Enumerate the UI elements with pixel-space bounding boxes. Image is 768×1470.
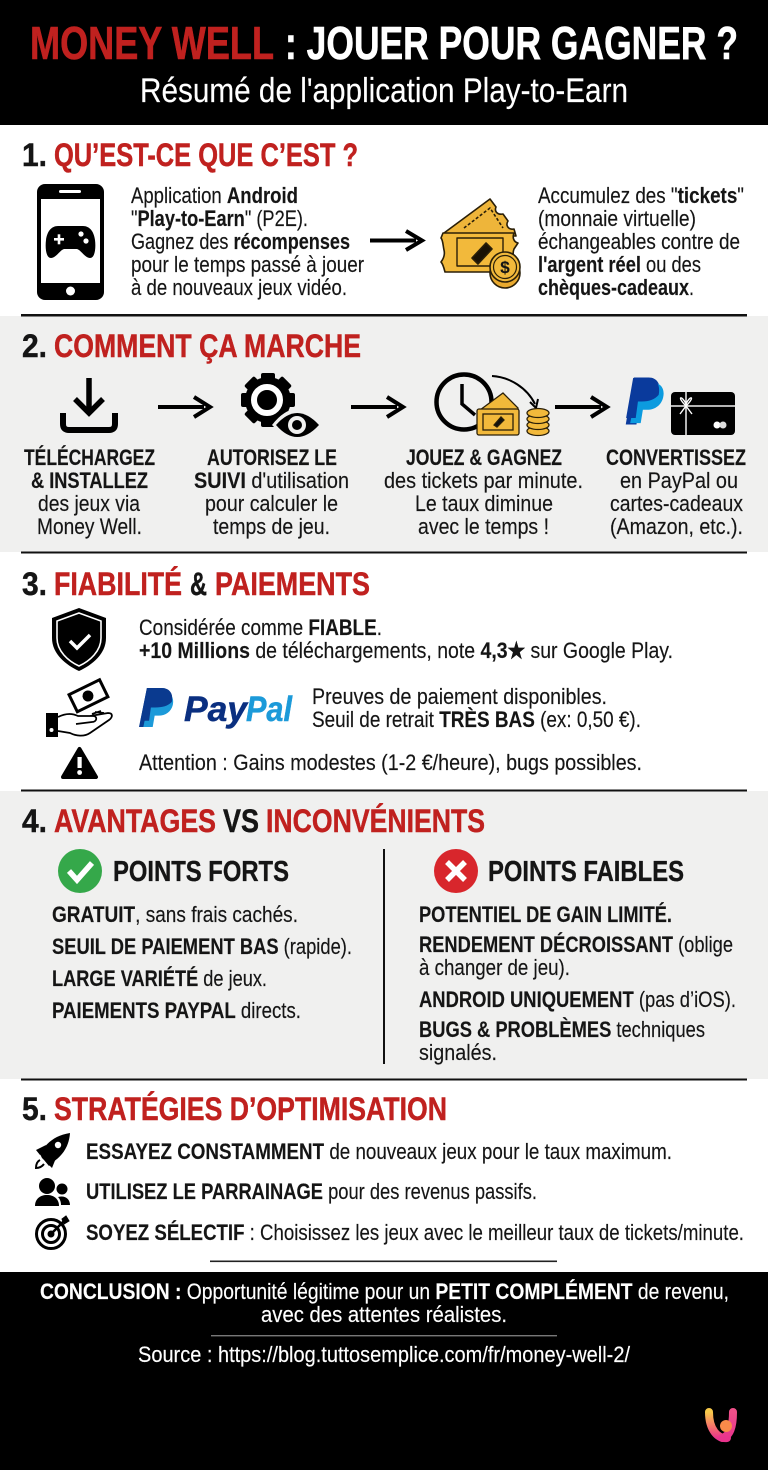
text: conclusion xyxy=(40,1279,729,1327)
text: reliable: Considérée comme FIABLE. xyxy=(139,615,382,640)
arrow xyxy=(370,231,422,250)
heading 4 xyxy=(22,803,485,839)
icon: green check xyxy=(58,849,102,893)
icon: red cross xyxy=(434,849,478,893)
arrow 1 xyxy=(158,397,210,417)
panel: section 5 optimization strategies xyxy=(22,1091,744,1262)
text: reliable: +10 Millions de téléchargements, note 4,3★ sur Google Play. xyxy=(139,638,673,663)
text: app description: Gagnez des récompenses xyxy=(131,229,350,254)
icon: warning xyxy=(63,749,96,777)
panel: section 3 reliability and payments xyxy=(22,566,673,777)
heading 3: FIABILITÉ xyxy=(54,566,182,602)
icon: brand logo xyxy=(709,1412,733,1438)
subtitle: Résumé de l'application Play-to-Earn xyxy=(140,72,628,110)
icon: gear and eye xyxy=(241,373,323,438)
list: weaknesses: ANDROID UNIQUEMENT (pas d’iOS). xyxy=(419,987,736,1012)
title: MONEY WELL xyxy=(30,17,274,69)
text: tickets description xyxy=(538,183,744,300)
arrow 2 xyxy=(351,397,403,417)
step 1 text: Money Well. xyxy=(37,514,142,539)
icon: gift card xyxy=(671,392,735,435)
text: reliable xyxy=(139,615,673,663)
step 2 text: AUTORISEZ LE xyxy=(207,445,337,470)
list: weaknesses: RENDEMENT DÉCROISSANT (oblige xyxy=(419,932,733,957)
text: payment proofs: Preuves de paiement disponibles. xyxy=(312,684,607,709)
heading 3: & xyxy=(190,566,207,602)
heading 3: PAIEMENTS xyxy=(215,566,370,602)
step 4 text: cartes-cadeaux xyxy=(610,491,743,516)
text: app description xyxy=(131,183,364,300)
icon: rocket xyxy=(36,1133,70,1168)
step 1 text: TÉLÉCHARGEZ xyxy=(24,445,155,470)
step 3 text: avec le temps ! xyxy=(418,514,549,539)
title xyxy=(30,17,738,69)
step 4 text xyxy=(606,445,746,539)
text: payment proofs: Seuil de retrait TRÈS BAS (ex: 0,50 €). xyxy=(312,707,641,732)
arrow 3 xyxy=(555,397,607,417)
heading: strengths: POINTS FORTS xyxy=(113,856,289,888)
panel: section 2 how it works xyxy=(22,328,746,539)
icon: clock tickets coins xyxy=(436,374,549,436)
step 4 text: (Amazon, etc.). xyxy=(610,514,743,539)
heading 5: STRATÉGIES D’OPTIMISATION xyxy=(54,1091,447,1127)
step 3 text: Le taux diminue xyxy=(415,491,553,516)
step 2 text xyxy=(194,445,349,539)
text: app description: "Play-to-Earn" (P2E). xyxy=(131,206,308,231)
step 1 text: & INSTALLEZ xyxy=(31,468,148,493)
heading 2: 2. xyxy=(22,328,47,364)
text: tickets description: (monnaie virtuelle) xyxy=(538,206,696,231)
divider xyxy=(383,849,385,1064)
logo: PayPal: Pay xyxy=(184,690,249,729)
icon: shield xyxy=(52,608,106,671)
heading 3: 3. xyxy=(22,566,47,602)
header band xyxy=(0,0,768,125)
heading 5: 5. xyxy=(22,1091,47,1127)
step 2 text: pour calculer le xyxy=(205,491,338,516)
heading 3 xyxy=(22,566,370,602)
text: strategy 2: UTILISEZ LE PARRAINAGE pour des revenus passifs. xyxy=(86,1179,537,1204)
icon: phone with gamepad xyxy=(37,184,104,300)
heading 2: COMMENT ÇA MARCHE xyxy=(54,328,361,364)
icon: paypal P xyxy=(626,378,664,425)
panel: footer conclusion xyxy=(0,1272,768,1470)
text: tickets description: chèques-cadeaux. xyxy=(538,275,694,300)
text: app description: à de nouveaux jeux vidéo. xyxy=(131,275,347,300)
icon: hand with banknote xyxy=(46,678,112,737)
list: strengths: LARGE VARIÉTÉ de jeux. xyxy=(52,966,267,991)
text: source: Source : https://blog.tuttosemplice.com/fr/money-well-2/ xyxy=(138,1342,631,1367)
section backgrounds xyxy=(0,314,768,1080)
heading 1: QU’EST-CE QUE C’EST ? xyxy=(54,137,358,173)
heading 4: 4. xyxy=(22,803,47,839)
list: weaknesses xyxy=(419,902,736,1065)
list: weaknesses: signalés. xyxy=(419,1040,497,1065)
text: strategy 1: ESSAYEZ CONSTAMMENT de nouveaux jeux pour le taux maximum. xyxy=(86,1139,672,1164)
list: weaknesses: POTENTIEL DE GAIN LIMITÉ. xyxy=(419,902,672,927)
step 1 text: des jeux via xyxy=(38,491,141,516)
step 2 text: SUIVI d'utilisation xyxy=(194,468,349,493)
text: conclusion: CONCLUSION : Opportunité légitime pour un PETIT COMPLÉMENT de revenu, xyxy=(40,1279,729,1304)
text: tickets description: l'argent réel ou des xyxy=(538,252,701,277)
list: strengths: SEUIL DE PAIEMENT BAS (rapide). xyxy=(52,934,352,959)
text: app description: Application Android xyxy=(131,183,298,208)
text: tickets description: Accumulez des "tickets" xyxy=(538,183,744,208)
text: tickets description: échangeables contre de xyxy=(538,229,740,254)
panel: section 4 pros and cons xyxy=(22,803,736,1065)
panel: section 1 what is it xyxy=(22,137,744,300)
step 3 text xyxy=(384,445,583,539)
list: strengths: PAIEMENTS PAYPAL directs. xyxy=(52,998,301,1023)
list: strengths xyxy=(52,902,352,1023)
heading 4: AVANTAGES xyxy=(54,803,216,839)
icon: target xyxy=(36,1216,69,1248)
list: weaknesses: BUGS & PROBLÈMES techniques xyxy=(419,1017,705,1042)
step 2 text: temps de jeu. xyxy=(213,514,330,539)
logo: PayPal: Pal xyxy=(246,690,293,729)
text: app description: pour le temps passé à jouer xyxy=(131,252,364,277)
step 3 text: JOUEZ & GAGNEZ xyxy=(406,445,562,470)
list: strengths: GRATUIT, sans frais cachés. xyxy=(52,902,298,927)
step 3 text: des tickets par minute. xyxy=(384,468,583,493)
step 1 text xyxy=(24,445,155,539)
step 4 text: en PayPal ou xyxy=(620,468,738,493)
heading 4: INCONVÉNIENTS xyxy=(266,803,485,839)
heading 4: VS xyxy=(223,803,259,839)
heading 1: 1. xyxy=(22,137,47,173)
list: weaknesses: à changer de jeu). xyxy=(419,955,570,980)
heading: weaknesses: POINTS FAIBLES xyxy=(488,856,684,888)
logo: PayPal xyxy=(139,688,293,729)
text: payment proofs xyxy=(312,684,641,732)
text: warning: Attention : Gains modestes (1-2 €/heure), bugs possibles. xyxy=(139,750,642,775)
icon: people xyxy=(35,1178,70,1206)
text: conclusion: avec des attentes réalistes. xyxy=(261,1302,507,1327)
icon label: coin dollar: $ xyxy=(500,258,510,277)
icon: download xyxy=(63,378,115,430)
icon: tickets and coin xyxy=(441,199,520,288)
